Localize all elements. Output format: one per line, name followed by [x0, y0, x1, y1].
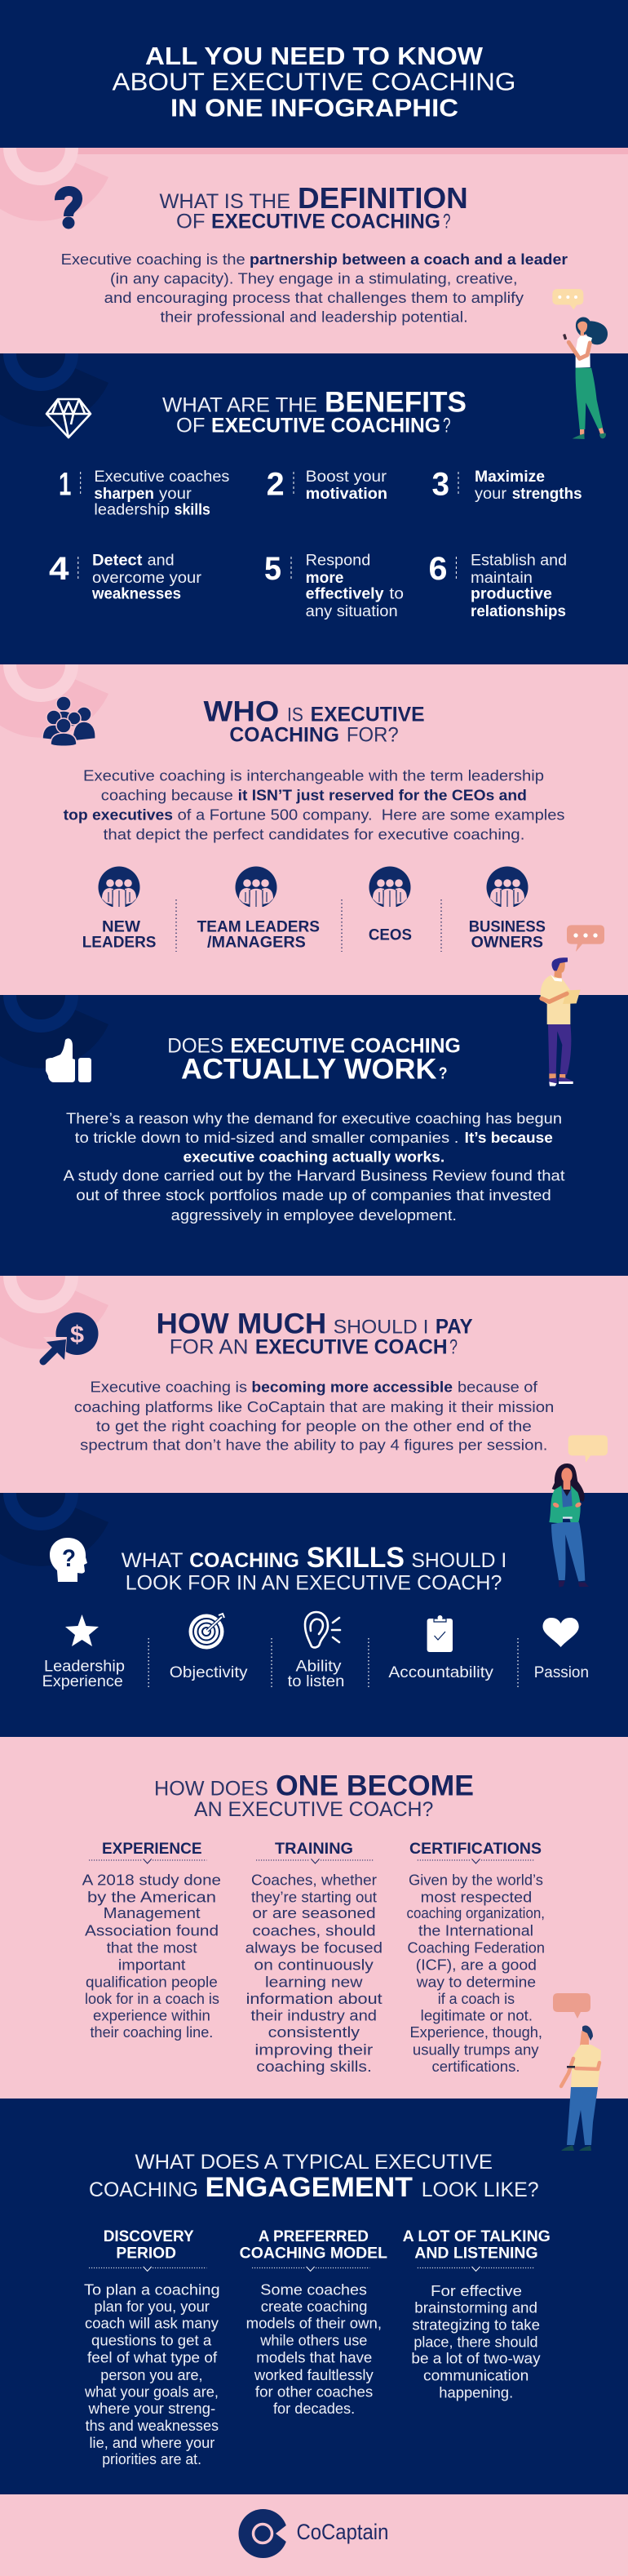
column: discovery period: [84, 2228, 220, 2467]
column: training: coaches, should: [252, 1921, 376, 1939]
icon: thumbs up: [46, 1038, 91, 1082]
column: certifications: CERTIFICATIONS: [409, 1840, 542, 1858]
column: preferred coaching model: COACHING MODEL: [240, 2245, 387, 2262]
heading: how much: [157, 1308, 473, 1358]
benefit 4: and: [148, 553, 175, 570]
benefit 5: effectively: [306, 585, 384, 602]
heading: become: AN EXECUTIVE COACH?: [194, 1798, 433, 1821]
heading: skills: COACHING: [189, 1549, 299, 1572]
text block: who body: coaching because: [101, 787, 233, 804]
benefit 3: your: [475, 486, 507, 503]
heading: how much: ?: [449, 1335, 458, 1358]
column: experience: experience within: [93, 2006, 210, 2023]
heading: who: WHO: [204, 695, 279, 727]
item: team leaders and managers: TEAM LEADERS: [197, 918, 320, 936]
benefit 3: [432, 467, 582, 503]
panel: footer: [0, 2494, 628, 2576]
heading: benefits: OF: [176, 414, 206, 437]
benefit 3: Maximize: [475, 469, 545, 486]
skill: leadership experience: [42, 1614, 125, 1690]
skill: ability to listen: to listen: [288, 1673, 344, 1690]
column: talking and listening: strategizing to take: [412, 2316, 540, 2334]
column: preferred coaching model: models of their own,: [246, 2315, 382, 2332]
heading: definition: [160, 181, 468, 233]
column: discovery period: lie, and where your: [90, 2434, 214, 2451]
benefit 4: weaknesses: [91, 585, 181, 602]
benefit 3: strengths: [512, 486, 582, 503]
column: preferred coaching model: A PREFERRED: [259, 2228, 369, 2245]
panel: title banner: [0, 0, 628, 148]
heading: skills: LOOK FOR IN AN EXECUTIVE COACH?: [126, 1572, 502, 1595]
benefit 1: [59, 467, 229, 519]
column: certifications: way to determine: [416, 1973, 536, 1990]
text block: who body: top executives: [64, 806, 173, 824]
text block: pay body: becoming more accessible: [251, 1379, 453, 1396]
item: new leaders: NEW: [102, 918, 141, 936]
text block: pay body: to get the right coaching for people on the other end of the: [96, 1417, 532, 1434]
column: experience: look for in a coach is: [85, 1990, 219, 2007]
benefit 6: relationships: [471, 603, 566, 620]
heading: who: COACHING: [229, 723, 339, 746]
text block: definition body: partnership between a coach and a leader: [250, 251, 568, 268]
item: business owners: OWNERS: [471, 934, 543, 952]
column: experience: important: [118, 1956, 185, 1973]
panel: definition: [0, 110, 628, 353]
heading: engagement: ENGAGEMENT: [206, 2172, 413, 2203]
benefit 4: [49, 551, 202, 602]
benefit 4: 4: [49, 551, 69, 587]
logo: CoCaptain: CoCaptain: [297, 2520, 388, 2544]
icon: head with question mark: ?: [62, 1545, 76, 1572]
skill: ability to listen: Ability: [295, 1658, 342, 1675]
heading: who: FOR?: [347, 723, 399, 746]
column: talking and listening: A LOT OF TALKING: [403, 2228, 551, 2245]
text block: who body: of a Fortune 500 company. Here are some examples: [178, 806, 564, 824]
column: discovery period: what your goals are,: [84, 2383, 219, 2400]
column: training: coaching skills.: [256, 2058, 372, 2075]
heading: how much: PAY: [436, 1315, 473, 1338]
heading: how much: SHOULD I: [334, 1316, 429, 1338]
column: certifications: if a coach is: [438, 1990, 515, 2007]
heading: actually work: [167, 1034, 461, 1086]
item: team leaders and managers: /MANAGERS: [207, 934, 306, 952]
column: preferred coaching model: models that have: [256, 2349, 372, 2365]
item: new leaders: [82, 867, 157, 952]
figure: woman with crossed arms and blank speech bubble: [549, 1435, 608, 1588]
benefit 2: motivation: [306, 486, 387, 503]
icon: dollar and arrow: $: [70, 1321, 84, 1348]
benefit 5: any situation: [306, 603, 398, 620]
column: training: or are seasoned: [252, 1904, 376, 1921]
column: talking and listening: be a lot of two-way: [411, 2350, 541, 2367]
benefit 6: 6: [429, 551, 447, 587]
benefit 6: [429, 551, 567, 620]
skill: passion: Passion: [534, 1664, 589, 1681]
heading: benefits: BENEFITS: [325, 386, 467, 418]
column: certifications: the International: [418, 1921, 533, 1939]
benefit 4: Detect: [92, 553, 143, 570]
column: talking and listening: place, there should: [414, 2333, 538, 2351]
skill: ability to listen: [288, 1612, 344, 1690]
column: discovery period: coach will ask many: [85, 2315, 219, 2332]
column: discovery period: DISCOVERY: [104, 2228, 194, 2245]
text block: work body: A study done carried out by the Harvard Business Review found that: [64, 1167, 565, 1184]
heading: who: EXECUTIVE: [311, 703, 425, 726]
column: certifications: certifications.: [432, 2058, 520, 2075]
heading: engagement: LOOK LIKE?: [422, 2178, 539, 2201]
benefit 5: more: [306, 570, 343, 587]
heading: engagement: COACHING: [89, 2178, 198, 2201]
heading: benefits: EXECUTIVE COACHING: [211, 414, 440, 437]
column: certifications: most respected: [421, 1888, 532, 1905]
benefit 1: Executive coaches: [94, 469, 229, 486]
column: discovery period: feel of what type of: [87, 2349, 218, 2365]
icon: group of people: [42, 696, 95, 746]
text block: pay body: because of: [458, 1379, 538, 1396]
heading: definition: EXECUTIVE COACHING: [211, 210, 440, 233]
column: preferred coaching model: Some coaches: [260, 2281, 367, 2298]
text block: definition body: [61, 251, 568, 326]
column: certifications: coaching organization,: [406, 1904, 545, 1921]
column: experience: A 2018 study done: [82, 1871, 221, 1888]
text block: definition body: (in any capacity). They engage in a stimulating, creative,: [110, 270, 518, 287]
column: discovery period: person you are,: [100, 2366, 202, 2383]
figure: man with clipboard and speech bubble: [541, 925, 604, 1086]
panel: coaching skills: [0, 1455, 628, 1737]
heading: how much: EXECUTIVE COACH: [255, 1335, 448, 1358]
text block: work body: to trickle down to mid-sized and smaller companies .: [75, 1129, 458, 1146]
column: certifications: [406, 1840, 545, 2075]
heading: benefits: ?: [443, 414, 450, 437]
column: experience: EXPERIENCE: [102, 1840, 202, 1858]
skill: accountability: Accountability: [388, 1664, 494, 1681]
benefit 6: maintain: [471, 570, 533, 587]
benefit 3: 3: [432, 467, 449, 503]
text block: definition body: Executive coaching is the: [61, 251, 245, 268]
text block: work body: executive coaching actually works.: [183, 1148, 444, 1165]
benefit 5: Respond: [306, 553, 370, 570]
benefit 6: Establish and: [471, 553, 567, 570]
text block: work body: There’s a reason why the demand for executive coaching has begun: [66, 1110, 562, 1127]
icon: head with question mark: [50, 1538, 87, 1582]
column: experience: that the most: [107, 1939, 197, 1956]
column: training: always be focused: [245, 1939, 383, 1956]
column: training: improving their: [254, 2041, 373, 2058]
heading: actually work: DOES: [167, 1034, 223, 1057]
item: business owners: [469, 867, 546, 952]
column: training: on continuously: [254, 1956, 374, 1973]
heading: how much: FOR AN: [170, 1335, 248, 1358]
item: ceos: CEOS: [369, 926, 412, 944]
text block: work body: [64, 1110, 565, 1224]
title: ALL YOU NEED TO KNOW: [145, 42, 484, 70]
column: discovery period: ths and weaknesses: [86, 2417, 219, 2434]
heading: who: IS: [287, 704, 303, 726]
column: experience: Management: [104, 1904, 201, 1921]
column: preferred coaching model: for other coaches: [255, 2383, 373, 2400]
icon: dollar and arrow: [43, 1312, 98, 1362]
benefit 2: 2: [267, 467, 285, 503]
item: ceos: [369, 867, 412, 944]
column: discovery period: questions to get a: [91, 2332, 212, 2349]
heading: become: ONE BECOME: [276, 1770, 474, 1801]
figure: man with phone and speech bubble: [553, 1993, 601, 2151]
column: preferred coaching model: create coaching: [261, 2298, 367, 2315]
title: IN ONE INFOGRAPHIC: [170, 94, 458, 122]
panel: how much to pay: [0, 1238, 628, 1493]
heading: definition: OF: [176, 210, 206, 233]
skill: objectivity: [170, 1614, 248, 1681]
column: preferred coaching model: for decades.: [273, 2400, 355, 2417]
heading: skills: [122, 1542, 506, 1595]
benefit 1: leadership: [94, 502, 170, 519]
heading: definition: ?: [443, 210, 450, 233]
column: training: Coaches, whether: [251, 1871, 377, 1888]
column: discovery period: To plan a coaching: [84, 2281, 220, 2298]
heading: actually work: ?: [439, 1065, 448, 1083]
heading: engagement: WHAT DOES A TYPICAL EXECUTIVE: [135, 2151, 493, 2174]
text block: definition body: their professional and leadership potential.: [160, 309, 468, 326]
panel: does it work: [0, 957, 628, 1276]
column: experience: by the American: [87, 1888, 216, 1905]
column: training: consistently: [268, 2023, 360, 2041]
column: preferred coaching model: while others use: [259, 2332, 367, 2349]
column: certifications: usually trumps any: [413, 2041, 539, 2058]
column: talking and listening: brainstorming and: [414, 2299, 537, 2316]
text block: pay body: coaching platforms like CoCaptain that are making it their mission: [74, 1398, 554, 1415]
skill: leadership experience: Leadership: [44, 1658, 125, 1675]
column: training: [245, 1840, 383, 2075]
icon: question mark: [60, 191, 77, 229]
column: preferred coaching model: worked faultlessly: [254, 2366, 374, 2383]
text block: work body: It’s because: [465, 1129, 553, 1146]
benefit 5: to: [389, 585, 404, 602]
text block: pay body: Executive coaching is: [90, 1379, 247, 1396]
figure: woman with phone and speech bubble: [552, 289, 608, 439]
text block: pay body: [74, 1379, 554, 1454]
column: preferred coaching model: [240, 2228, 387, 2417]
text block: who body: Executive coaching is interchangeable with the term leadership: [83, 767, 544, 784]
heading: skills: WHAT: [122, 1549, 183, 1572]
column: training: TRAINING: [275, 1840, 353, 1858]
column: experience: [82, 1840, 221, 2041]
column: training: learning new: [265, 1973, 363, 1990]
title: ABOUT EXECUTIVE COACHING: [113, 68, 515, 96]
column: experience: their coaching line.: [90, 2023, 213, 2041]
heading: skills: SHOULD I: [411, 1549, 506, 1572]
item: team leaders and managers: [197, 867, 320, 952]
column: talking and listening: [403, 2228, 551, 2401]
heading: skills: SKILLS: [307, 1542, 405, 1574]
column: certifications: Coaching Federation: [408, 1939, 545, 1956]
heading: who: [204, 695, 425, 746]
benefit 6: productive: [471, 585, 552, 602]
column: training: information about: [246, 1990, 383, 2007]
heading: definition: WHAT IS THE: [160, 190, 290, 213]
text block: pay body: spectrum that don’t have the ability to pay 4 figures per session.: [80, 1437, 547, 1454]
skill: accountability: [388, 1615, 494, 1681]
benefit 1: skills: [175, 502, 210, 519]
column: certifications: legitimate or not.: [421, 2006, 533, 2023]
text block: who body: [64, 767, 565, 842]
skill: leadership experience: Experience: [42, 1673, 123, 1690]
panel: typical engagement: [0, 2099, 628, 2494]
benefit 4: overcome your: [92, 570, 202, 587]
benefit 5: 5: [264, 551, 281, 587]
logo: CoCaptain: [238, 2509, 388, 2558]
text block: definition body: and encouraging process that challenges them to amplify: [104, 289, 524, 306]
skill: passion: [534, 1618, 589, 1681]
benefit 2: [267, 467, 387, 503]
column: training: they’re starting out: [251, 1888, 377, 1905]
text block: who body: that depict the perfect candidates for executive coaching.: [104, 825, 524, 842]
text block: work body: out of three stock portfolios made up of companies that invested: [76, 1187, 551, 1204]
heading: benefits: WHAT ARE THE: [162, 393, 317, 416]
column: talking and listening: AND LISTENING: [414, 2245, 538, 2262]
column: talking and listening: For effective: [431, 2282, 522, 2299]
benefit 5: [264, 551, 404, 620]
heading: become: [154, 1770, 474, 1821]
column: talking and listening: happening.: [439, 2383, 513, 2401]
column: training: their industry and: [251, 2006, 377, 2023]
title: [113, 42, 515, 122]
column: discovery period: priorities are at.: [102, 2450, 201, 2467]
panel: who is it for: [0, 627, 628, 996]
icon: diamond: [46, 399, 91, 437]
column: discovery period: PERIOD: [116, 2245, 176, 2262]
text block: work body: aggressively in employee development.: [171, 1206, 457, 1224]
column: discovery period: plan for you, your: [94, 2298, 210, 2315]
column: discovery period: where your streng-: [87, 2400, 215, 2417]
benefit 1: sharpen: [94, 486, 154, 503]
text block: who body: it ISN’T just reserved for the CEOs and: [238, 787, 527, 804]
panel: how to become a coach: [0, 1737, 628, 2099]
column: certifications: Given by the world’s: [409, 1871, 543, 1888]
heading: how much: HOW MUCH: [157, 1308, 326, 1339]
column: experience: Association found: [85, 1921, 219, 1939]
item: business owners: BUSINESS: [469, 918, 546, 936]
item: new leaders: LEADERS: [82, 934, 157, 952]
heading: become: HOW DOES: [154, 1777, 268, 1800]
heading: actually work: ACTUALLY WORK: [181, 1054, 436, 1086]
benefit 1: 1: [59, 467, 71, 503]
benefit 1: your: [159, 486, 192, 503]
heading: actually work: EXECUTIVE COACHING: [230, 1034, 461, 1057]
heading: engagement: [89, 2151, 539, 2203]
heading: benefits: [162, 386, 467, 437]
column: experience: qualification people: [86, 1973, 218, 1990]
panel: benefits: [0, 316, 628, 664]
benefit 2: Boost your: [306, 469, 387, 486]
column: talking and listening: communication: [423, 2367, 528, 2383]
column: certifications: (ICF), are a good: [416, 1956, 537, 1973]
heading: definition: DEFINITION: [298, 181, 468, 215]
column: certifications: Experience, though,: [409, 2023, 542, 2041]
skill: objectivity: Objectivity: [170, 1664, 248, 1681]
